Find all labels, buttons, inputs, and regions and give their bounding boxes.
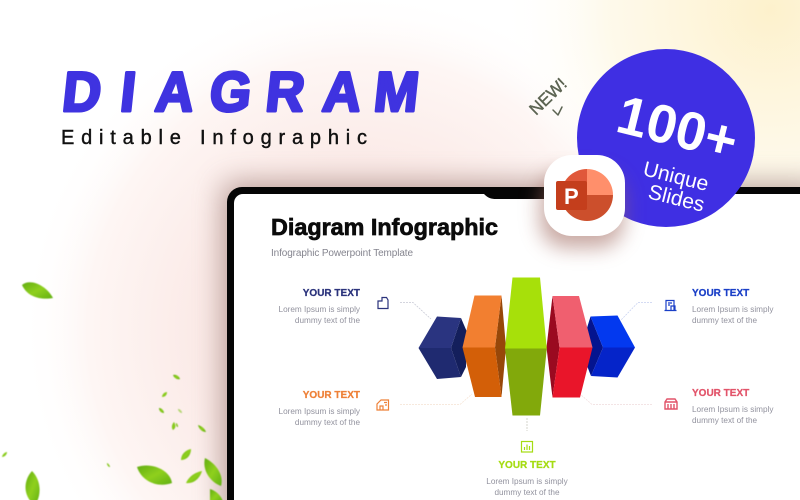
item: lower right: dummy text of the (692, 416, 758, 425)
leaves (2, 282, 223, 500)
item: bottom centre: dummy text of the (494, 488, 560, 497)
item: bottom centre: Lorem Ipsum is simply (486, 477, 569, 486)
item: lower left: YOUR TEXT (303, 390, 360, 401)
item: lower right: YOUR TEXT (692, 388, 749, 399)
3d diagram (418, 278, 635, 416)
badge caption: Slides (646, 181, 707, 217)
badge number: 100+ (611, 84, 744, 172)
navy block (418, 316, 467, 379)
title: DIAGRAM (60, 60, 422, 123)
subtitle: Editable Infographic (61, 127, 367, 149)
icon: lower right (665, 399, 677, 409)
item: lower left (279, 390, 361, 427)
powerpoint app icon (540, 155, 625, 248)
red block (546, 296, 592, 398)
lime block (505, 278, 547, 416)
powerpoint app icon: P (564, 184, 579, 209)
item: top left: YOUR TEXT (303, 288, 360, 299)
item: top left (279, 288, 361, 325)
icon: top right (664, 300, 676, 310)
item: lower left: Lorem Ipsum is simply (279, 407, 361, 416)
slide heading: Diagram Infographic (271, 214, 498, 240)
new label: NEW! (526, 74, 571, 119)
badge circle (577, 49, 755, 227)
connector lines (400, 302, 652, 431)
slide subheading: Infographic Powerpoint Template (271, 248, 413, 259)
item: lower right (692, 388, 774, 425)
icon: bottom centre (522, 442, 532, 452)
icon: lower left (377, 400, 388, 410)
item: top left: Lorem Ipsum is simply (279, 305, 361, 314)
item: top right: Lorem Ipsum is simply (692, 305, 774, 314)
item: lower left: dummy text of the (295, 418, 360, 427)
item: top right: dummy text of the (692, 316, 758, 325)
badge caption: Unique (641, 158, 711, 196)
orange block (462, 296, 506, 397)
item: top right: YOUR TEXT (692, 288, 749, 299)
icon: top left (378, 298, 388, 308)
badge caption (641, 158, 711, 217)
laptop screen frame (227, 187, 800, 500)
item: top right (692, 288, 774, 325)
item: top left: dummy text of the (295, 316, 360, 325)
item: bottom centre (486, 460, 569, 497)
item: lower right: Lorem Ipsum is simply (692, 405, 774, 414)
item: bottom centre: YOUR TEXT (498, 460, 556, 471)
blue block (587, 316, 635, 378)
